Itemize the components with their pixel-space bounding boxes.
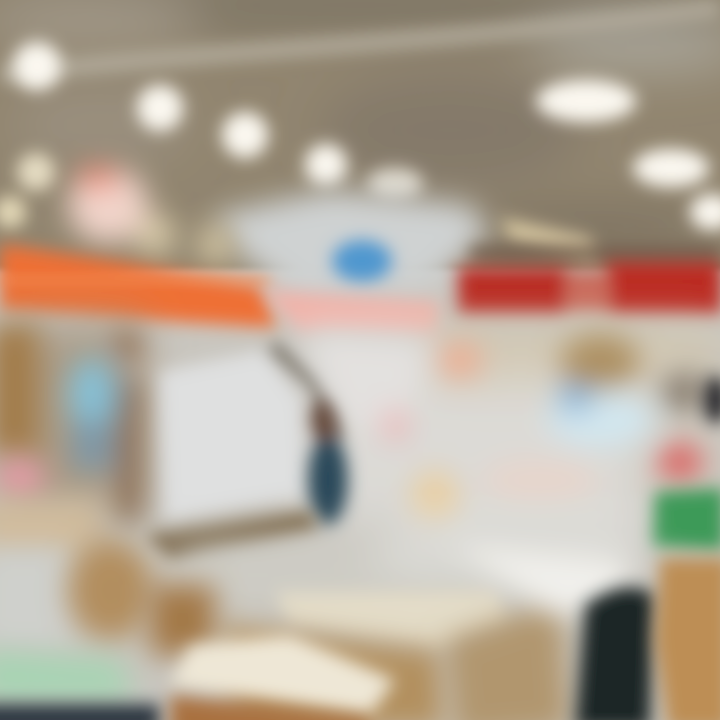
large white display panel [160, 345, 340, 520]
pink sign at left [68, 166, 233, 265]
brown floor shadow strip [145, 510, 320, 560]
green box at right [652, 488, 720, 550]
shopper in dark clothes [308, 398, 348, 526]
orange banner [0, 244, 278, 328]
red banner [458, 246, 720, 314]
pallet tables in foreground [170, 545, 630, 720]
wooden pallet at lower right [655, 558, 720, 720]
dark shopper in foreground [575, 587, 655, 720]
pink banner [262, 290, 440, 338]
shopper in blue at left [0, 329, 142, 520]
white display pale panels [305, 334, 709, 526]
floor and aisle [180, 530, 630, 600]
ceiling lights [0, 42, 720, 230]
boxes and bales at lower left [0, 500, 215, 720]
mid-floor backdrop [0, 325, 720, 550]
shelf at left [0, 325, 38, 455]
dark figure at right edge [704, 376, 720, 424]
hanging sign: white and blue [215, 190, 600, 300]
